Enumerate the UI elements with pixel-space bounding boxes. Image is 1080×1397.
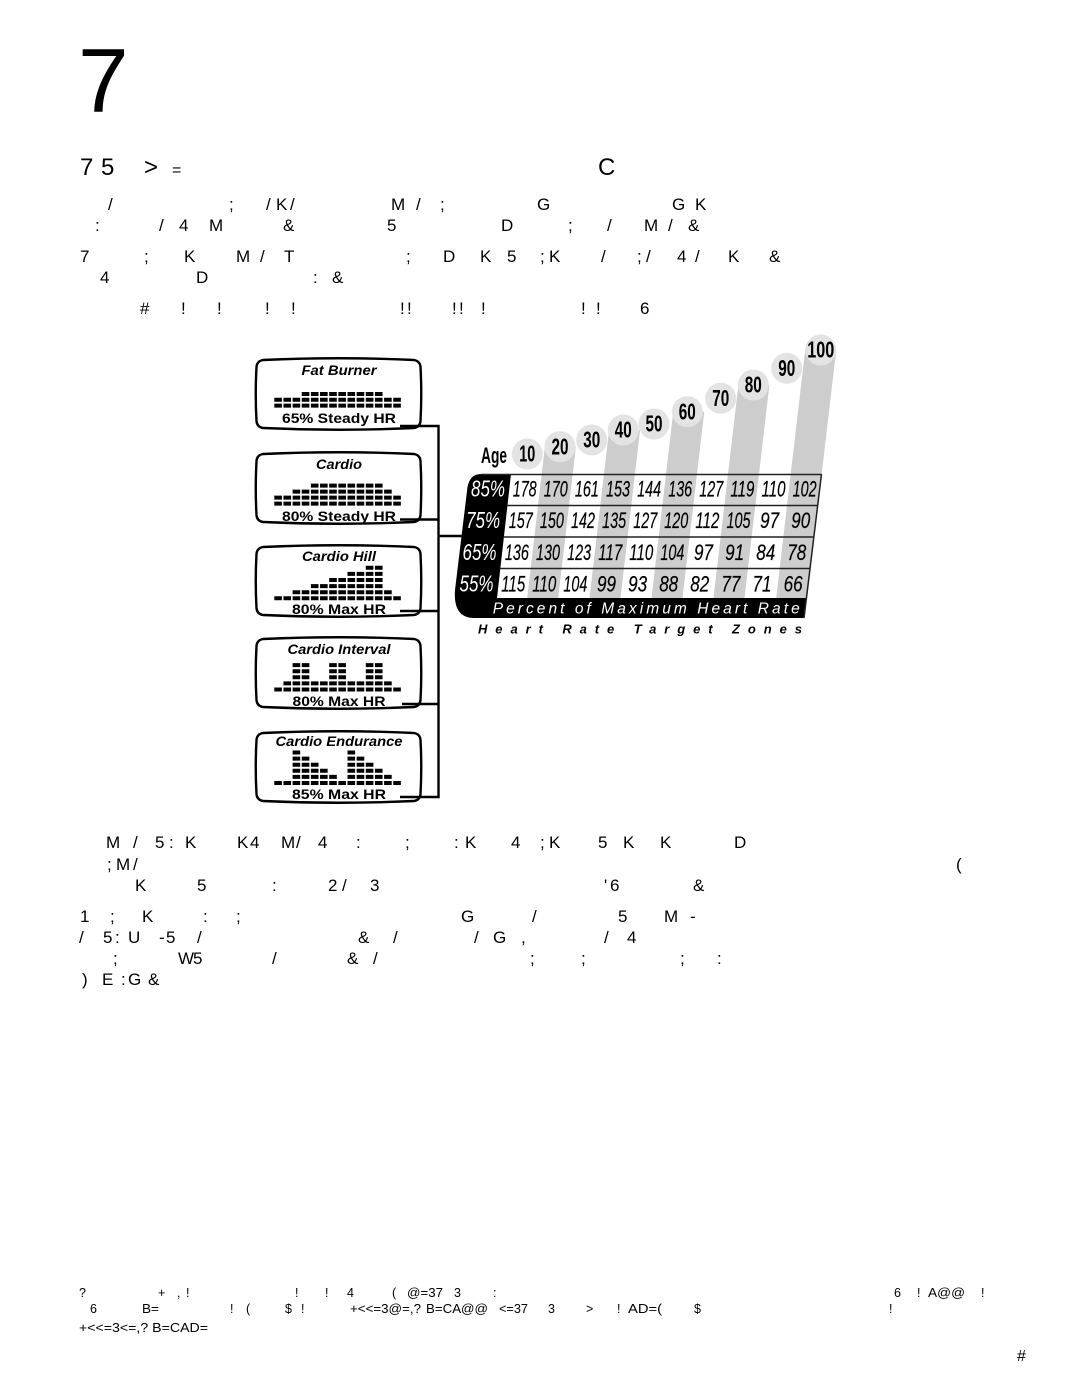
paragraph 4: M/5:KK4M/4:;:K4;K5KKD bbox=[106, 833, 746, 852]
age label: Age bbox=[481, 443, 507, 468]
row 55%: 88 bbox=[659, 572, 679, 597]
row 75%: 142 bbox=[571, 508, 595, 533]
footnote: A@@ bbox=[928, 1286, 965, 1300]
row 85%: 102 bbox=[793, 477, 817, 502]
age numbers: 50 bbox=[646, 411, 662, 437]
row 65%: 117 bbox=[598, 540, 623, 565]
page number: # bbox=[1017, 1348, 1026, 1365]
age numbers: 20 bbox=[552, 433, 568, 459]
chart: heart rate target zones bbox=[455, 334, 836, 636]
row 65%: 78 bbox=[787, 540, 807, 565]
row 55%: 115 bbox=[501, 572, 526, 597]
age numbers: 90 bbox=[778, 355, 795, 381]
row 55%: 99 bbox=[597, 572, 616, 597]
paragraph 5: /5:U-5/&//G,/4 bbox=[79, 928, 636, 947]
program card: Cardio Endurance: 85% Max HR bbox=[292, 786, 386, 802]
footnote: <=37 bbox=[499, 1302, 528, 1316]
row 55% bbox=[460, 571, 803, 597]
row 65%: 65% bbox=[462, 539, 496, 565]
program card: Fat Burner bbox=[256, 358, 421, 430]
row 75%: 112 bbox=[695, 508, 719, 533]
program card: Fat Burner: 65% Steady HR bbox=[282, 410, 396, 426]
row 65%: 91 bbox=[725, 540, 744, 565]
chart title: Heart Rate Target Zones bbox=[478, 621, 802, 636]
row 65%: 97 bbox=[694, 540, 714, 565]
paragraph 5 bbox=[79, 907, 722, 989]
paragraph 5: 1;K:;G/5M- bbox=[80, 907, 696, 926]
program card: Cardio Hill bbox=[256, 545, 421, 617]
paragraph 1 bbox=[95, 195, 707, 235]
paragraph 1: /;/K/M/;GGK bbox=[108, 195, 707, 214]
paragraph 5: ;W5/&/;;;: bbox=[113, 949, 722, 968]
row 75%: 105 bbox=[727, 508, 751, 533]
connector bracket bbox=[400, 425, 470, 798]
age numbers: 60 bbox=[679, 398, 696, 424]
row 55%: 82 bbox=[690, 572, 709, 597]
row 85%: 153 bbox=[606, 477, 630, 502]
row 65%: 123 bbox=[567, 540, 592, 565]
row 75%: 135 bbox=[602, 508, 627, 533]
age stripes bbox=[527, 350, 836, 598]
chapter number: 7 bbox=[78, 31, 129, 132]
axis caption: Percent of Maximum Heart Rate bbox=[493, 600, 800, 617]
row 75%: 150 bbox=[540, 508, 564, 533]
row 65% bbox=[462, 539, 807, 565]
row 65%: 104 bbox=[660, 540, 684, 565]
row 55%: 104 bbox=[563, 572, 587, 597]
row 85%: 161 bbox=[575, 477, 599, 502]
row 55%: 55% bbox=[460, 571, 494, 597]
footnote: B=CA@@ bbox=[426, 1302, 488, 1316]
paragraph 4: ;M/( bbox=[107, 855, 962, 874]
row 75%: 127 bbox=[633, 508, 658, 533]
row 85%: 178 bbox=[513, 477, 537, 502]
age circles bbox=[512, 334, 836, 470]
age numbers: 10 bbox=[519, 441, 535, 467]
row 75%: 120 bbox=[664, 508, 689, 533]
section heading: 75>C bbox=[80, 154, 615, 181]
row 85%: 136 bbox=[668, 477, 693, 502]
program card: Cardio Interval bbox=[256, 637, 421, 709]
paragraph 1: :/4M&5D;/M/& bbox=[95, 216, 700, 235]
row 65%: 110 bbox=[629, 540, 654, 565]
paragraph 4 bbox=[106, 833, 962, 895]
program card: Cardio: Cardio bbox=[316, 456, 362, 472]
age numbers: 30 bbox=[583, 427, 600, 453]
program card: Cardio Hill: Cardio Hill bbox=[302, 548, 377, 564]
paragraph 4: K5:2/3'6& bbox=[135, 876, 705, 895]
table rules bbox=[481, 474, 822, 618]
paragraph 3: #!!!!!!!!!!!6 bbox=[140, 299, 649, 318]
row 85%: 127 bbox=[699, 477, 724, 502]
row 75%: 90 bbox=[791, 508, 811, 533]
age numbers: 40 bbox=[615, 417, 632, 443]
footnote: AD=( bbox=[628, 1302, 663, 1316]
row 65%: 130 bbox=[536, 540, 560, 565]
row 85%: 144 bbox=[637, 477, 661, 502]
row 85%: 110 bbox=[762, 477, 786, 502]
row 55%: 66 bbox=[784, 572, 803, 597]
footnote bbox=[79, 1286, 984, 1335]
program card: Cardio: 80% Steady HR bbox=[282, 508, 396, 524]
row 65%: 136 bbox=[505, 540, 529, 565]
age numbers: 100 bbox=[807, 337, 834, 363]
footnote: 6!($!3>!$! bbox=[90, 1302, 892, 1316]
footnote: @=37 bbox=[407, 1286, 443, 1300]
row 55%: 93 bbox=[628, 572, 648, 597]
program card: Cardio bbox=[256, 452, 421, 524]
program card: Fat Burner: Fat Burner bbox=[302, 362, 378, 378]
row 75%: 157 bbox=[509, 508, 533, 533]
row 85%: 170 bbox=[544, 477, 568, 502]
paragraph 2: 4D:& bbox=[100, 268, 344, 287]
paragraph 2: 7;KM/T;DK5;K/;/4/K& bbox=[80, 247, 781, 266]
paragraph 5: )E:G& bbox=[82, 970, 160, 989]
diagram: workout programs bbox=[256, 358, 470, 803]
black percent panel bbox=[455, 474, 806, 618]
row 75%: 97 bbox=[760, 508, 780, 533]
row 55%: 110 bbox=[532, 572, 557, 597]
row 85% bbox=[471, 476, 817, 502]
row 55%: 71 bbox=[752, 572, 772, 597]
row 75%: 75% bbox=[466, 507, 500, 533]
footnote: +<<=3@=,? bbox=[350, 1302, 421, 1316]
age numbers: 80 bbox=[745, 372, 762, 398]
row 85%: 119 bbox=[730, 477, 754, 502]
age numbers bbox=[519, 337, 834, 467]
row 55%: 77 bbox=[721, 572, 741, 597]
footnote: ?+,!!!4(3:6!! bbox=[79, 1286, 984, 1300]
footnote: +<<=3<=,? B=CAD= bbox=[79, 1321, 208, 1335]
program card: Cardio Hill: 80% Max HR bbox=[292, 601, 386, 617]
footnote: B= bbox=[142, 1302, 159, 1316]
program card: Cardio Interval: Cardio Interval bbox=[288, 641, 392, 657]
program card: Cardio Endurance: Cardio Endurance bbox=[276, 733, 403, 749]
program card: Cardio Endurance bbox=[256, 731, 421, 803]
paragraph 2 bbox=[80, 247, 781, 287]
row 85%: 85% bbox=[471, 476, 505, 502]
row 75% bbox=[466, 507, 811, 533]
section heading: = bbox=[172, 162, 181, 179]
age numbers: 70 bbox=[712, 385, 729, 411]
row 65%: 84 bbox=[756, 540, 775, 565]
program card: Cardio Interval: 80% Max HR bbox=[292, 693, 386, 709]
